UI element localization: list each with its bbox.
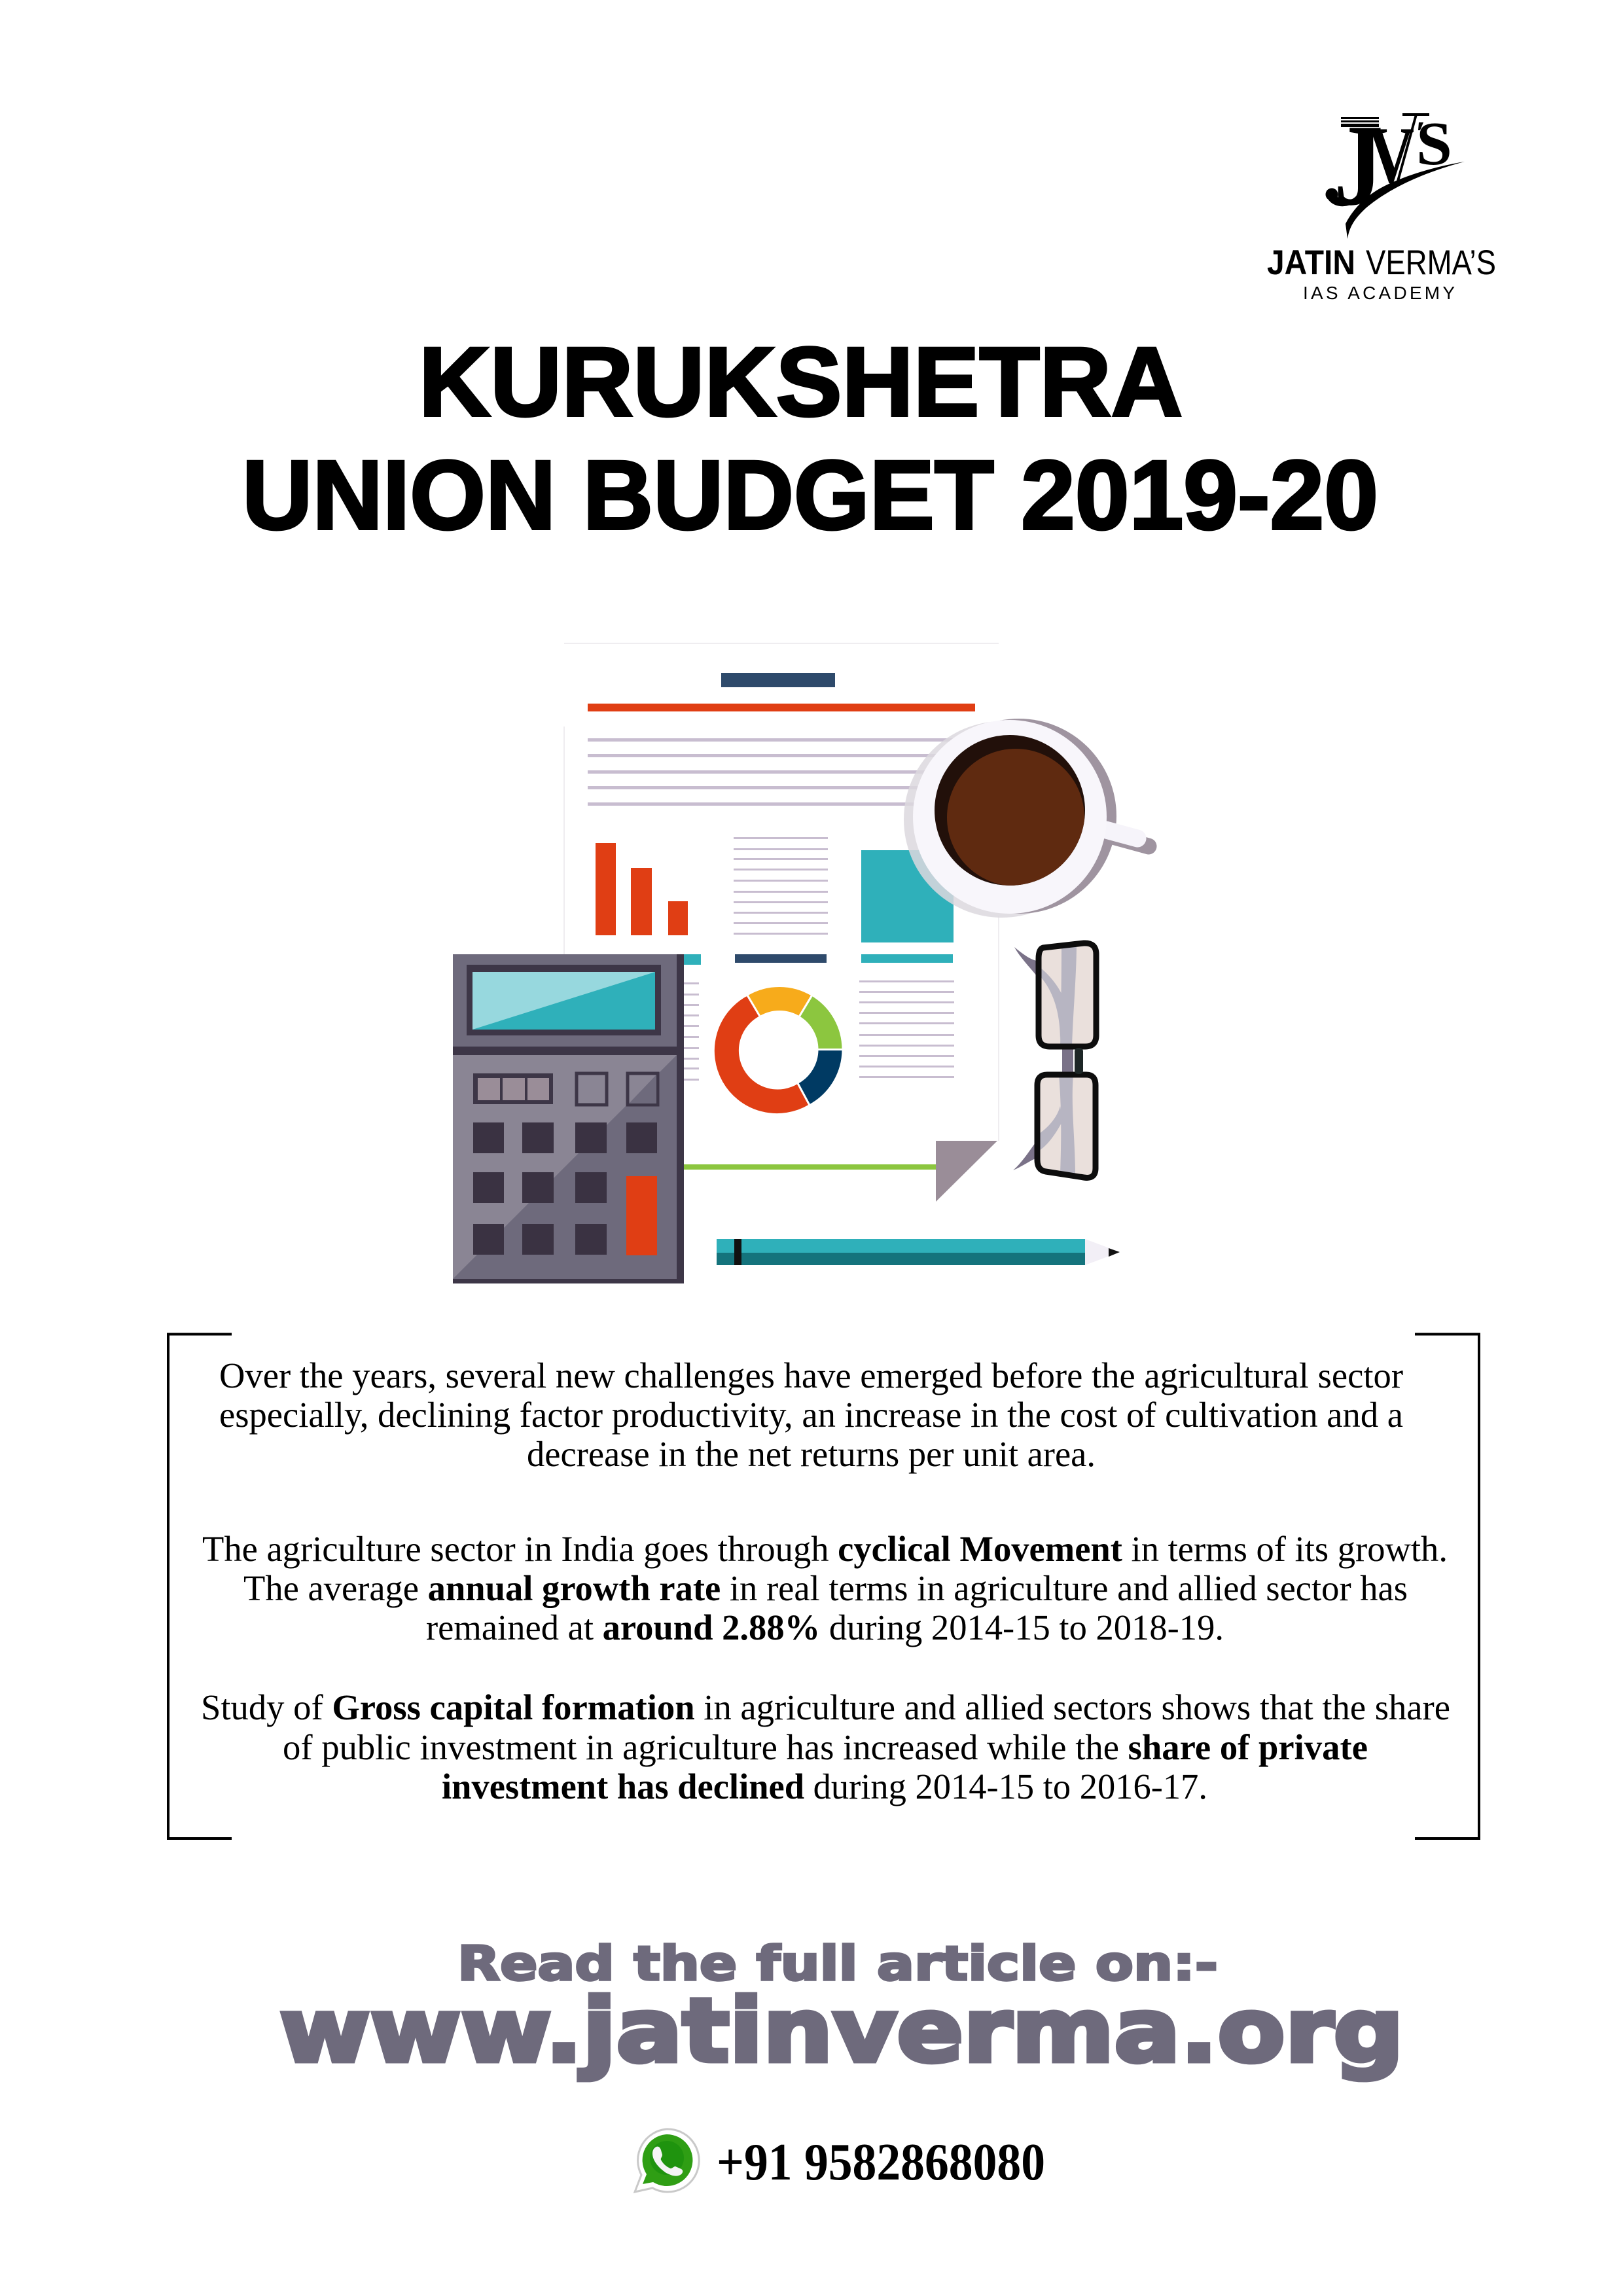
logo monogram JV'S: J (1334, 101, 1383, 230)
icon: coffee cup (904, 719, 1149, 918)
folded page corner (936, 1141, 997, 1202)
teal block (861, 850, 954, 942)
paragraph: capital formation: Study of Gross capital formation in agriculture and allied sectors shows that the share (201, 1687, 1450, 1727)
calculator function keys (473, 1073, 658, 1105)
paragraph: growth rate: remained at around 2.88% during 2014-15 to 2018-19. (426, 1607, 1224, 1647)
logo monogram JV'S: S (1416, 109, 1452, 177)
lower right column lines (859, 980, 954, 1078)
logo monogram JV'S: V (1368, 111, 1414, 200)
paragraph lines (588, 738, 961, 806)
column header tabs (684, 954, 953, 965)
paragraph: capital formation (201, 1687, 1450, 1806)
middle column lines (734, 837, 828, 935)
lower left column lines (684, 982, 699, 1081)
paragraph: growth rate: The agriculture sector in India goes through cyclical Movement in terms of its growth. (202, 1529, 1448, 1569)
paragraph: capital formation: investment has declined during 2014-15 to 2016-17. (442, 1767, 1207, 1806)
paragraph: new challenges: decrease in the net returns per unit area. (527, 1434, 1096, 1474)
paragraph: new challenges: Over the years, several new challenges have emerged before the agricultural sector (219, 1355, 1403, 1395)
icon: glasses (1013, 943, 1096, 1177)
logo wordmark bold part: JATIN (1267, 243, 1355, 282)
paragraph: capital formation: of public investment in agriculture has increased while the share of private (283, 1727, 1368, 1767)
document page (564, 643, 999, 1202)
document heading bars (588, 673, 975, 711)
logo subtitle: IAS ACADEMY (1303, 283, 1455, 303)
icon: calculator (453, 954, 684, 1283)
logo wordmark regular part: VERMA’S (1366, 243, 1496, 282)
contact (635, 2129, 1045, 2192)
call to action (279, 1936, 1404, 2082)
icon: pencil (717, 1239, 1120, 1265)
read the full article line: Read the full article on:- (457, 1936, 1218, 1991)
left bracket (168, 1334, 232, 1839)
paragraph: new challenges (219, 1355, 1403, 1474)
logo monogram JV'S (1326, 101, 1465, 239)
paragraph: new challenges: especially, declining factor productivity, an increase in the cost of cultivation and a (219, 1395, 1403, 1435)
paragraph: growth rate (202, 1529, 1448, 1647)
phone number: +91 9582868080 (717, 2134, 1045, 2191)
website address: www.jatinverma.org (279, 1980, 1404, 2082)
title: KURUKSHETRA (419, 327, 1183, 437)
illustration: budget report on a desk (453, 643, 1149, 1283)
title (242, 327, 1378, 550)
panel: bracketed summary (168, 1334, 1479, 1839)
paragraph: growth rate: The average annual growth rate in real terms in agriculture and allied sector has (243, 1568, 1408, 1608)
icon: whatsapp (635, 2129, 699, 2192)
right bracket (1415, 1334, 1479, 1839)
calculator keypad (473, 1122, 657, 1255)
logo: Jatin Verma's IAS Academy (1267, 101, 1496, 303)
green rule (684, 1164, 936, 1170)
calculator screen (467, 965, 661, 1035)
calculator red key (626, 1176, 657, 1255)
mini bar chart (596, 843, 688, 935)
donut chart (713, 986, 843, 1115)
title: UNION BUDGET 2019-20 (242, 440, 1378, 550)
